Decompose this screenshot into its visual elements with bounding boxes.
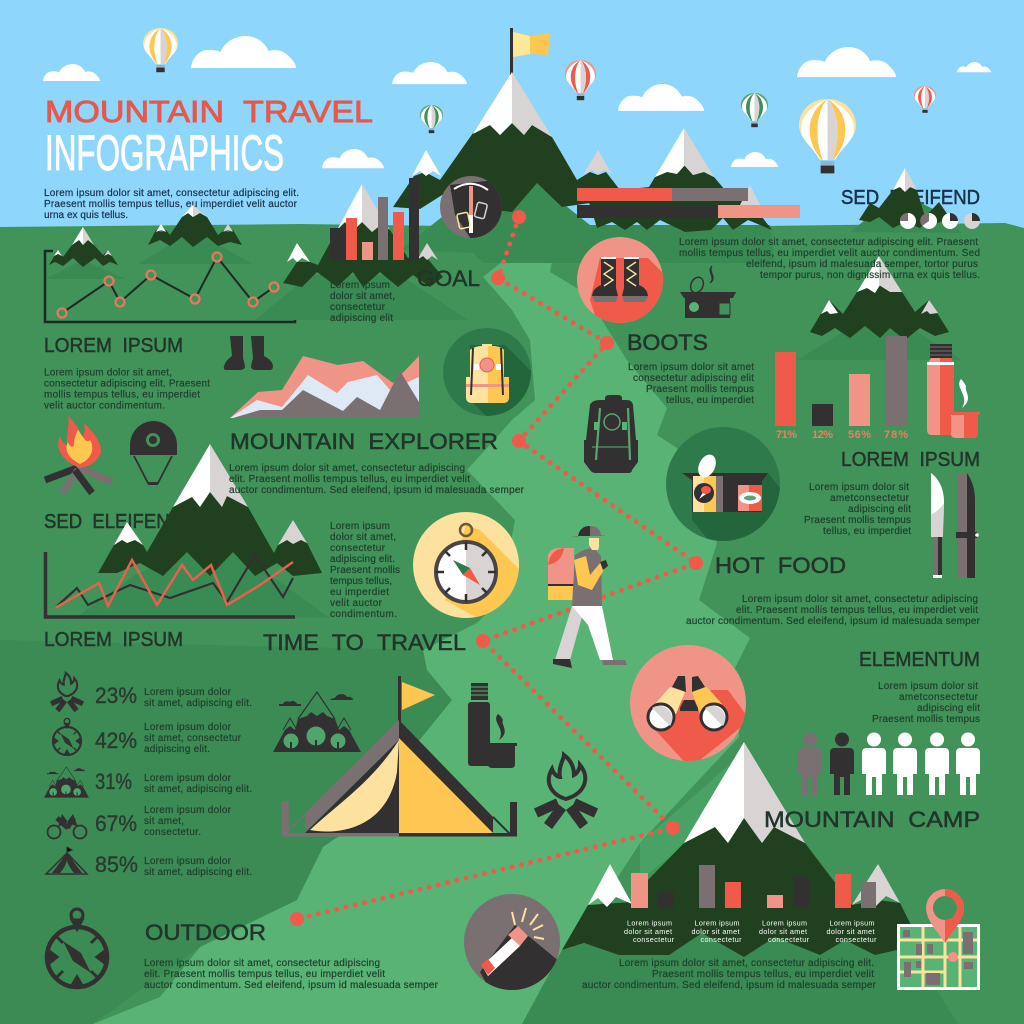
backpack circle bbox=[443, 328, 531, 416]
text under mountain bars: dolor sit amet, bbox=[330, 291, 395, 302]
explorer text: auctor condimentum. Sed eleifend, ipsum id malesuada semper bbox=[229, 485, 525, 496]
grass ground bbox=[0, 223, 1024, 1024]
bars on camp mountain bbox=[631, 865, 876, 908]
explorer text: Lorem ipsum dolor sit amet, consectetur adipiscing bbox=[229, 463, 465, 474]
middle text column: adipiscing elit. bbox=[330, 554, 395, 565]
heading: mountain explorer: MOUNTAIN EXPLORER bbox=[230, 429, 498, 454]
bottom right text bbox=[582, 958, 877, 991]
title: MOUNTAIN TRAVEL bbox=[45, 94, 373, 129]
icon: campfire bbox=[45, 416, 112, 493]
outdoor text: Lorem ipsum dolor sit amet, consectetur adipiscing bbox=[144, 958, 380, 969]
left text block: velit auctor condimentum. bbox=[44, 400, 165, 412]
stat row 31%: sit amet, adipiscing elit. bbox=[144, 784, 252, 795]
middle text column: Praesent mollis bbox=[330, 565, 400, 576]
white captions under bars: Lorem ipsum bbox=[627, 918, 672, 928]
bar chart with percentages: 71% bbox=[776, 429, 797, 441]
boots text: Lorem ipsum dolor sit amet bbox=[628, 362, 754, 373]
icon: mountain and trees bbox=[273, 692, 361, 752]
white captions under bars: Lorem ipsum bbox=[694, 918, 740, 928]
bottom right text: Praesent mollis tempus tellus, eu imperdiet velit bbox=[652, 969, 874, 980]
hot food text: Lorem ipsum dolor sit amet, consectetur adipiscing bbox=[742, 594, 978, 605]
white captions under bars: consectetur bbox=[700, 935, 742, 944]
pie charts bbox=[900, 213, 980, 229]
stat row 23%: sit amet, adipiscing elit. bbox=[144, 698, 252, 709]
light green trail bbox=[93, 253, 750, 1024]
intro text: urna ex quis tellus. bbox=[44, 210, 128, 221]
stat row 23%: 23% bbox=[95, 683, 137, 708]
title: INFOGRAPHICS bbox=[45, 125, 284, 181]
stat row 85%: 85% bbox=[95, 852, 138, 877]
hiker bbox=[548, 526, 627, 668]
stat row 85% bbox=[46, 847, 252, 878]
hot food text: elit. Praesent mollis tempus tellus, eu imperdiet velit bbox=[736, 605, 978, 616]
icon: outlined campfire bbox=[536, 755, 596, 826]
white captions under bars: Lorem ipsum bbox=[762, 918, 807, 928]
top right text bbox=[679, 237, 980, 281]
white captions under bars: consectetur bbox=[768, 935, 810, 944]
white captions under bars: consectetur bbox=[633, 935, 675, 944]
stat row 23% bbox=[51, 673, 252, 711]
outdoor text: auctor condimentum. Sed eleifend, ipsum id malesuada semper bbox=[144, 980, 439, 991]
white captions under bars: dolor sit amet bbox=[624, 927, 672, 936]
white captions under bars: dolor sit amet bbox=[759, 927, 807, 936]
left text block: Lorem ipsum dolor sit amet, bbox=[44, 368, 172, 378]
people pictogram bbox=[798, 732, 980, 795]
white captions under bars bbox=[624, 918, 877, 944]
knives text: adipiscing elit bbox=[848, 504, 911, 515]
icon: helmet bbox=[130, 421, 177, 485]
bottom right text: Lorem ipsum dolor sit amet, consectetur adipiscing elit. bbox=[619, 958, 874, 969]
mountain with bars bbox=[255, 178, 468, 320]
heading: goal: GOAL bbox=[417, 266, 480, 291]
boots text: Praesent mollis tempus bbox=[646, 384, 754, 395]
tent bbox=[282, 676, 517, 836]
line chart mid left bbox=[46, 552, 295, 617]
clouds bbox=[43, 36, 991, 168]
heading: elementum: ELEMENTUM bbox=[859, 649, 980, 671]
knives text: Lorem ipsum dolor sit bbox=[809, 482, 909, 493]
right mountain bbox=[797, 256, 962, 360]
intro text: Praesent mollis tempus tellus, eu imperdiet velit auctor bbox=[44, 199, 298, 210]
bar chart with percentages: 78% bbox=[884, 429, 908, 441]
intro text bbox=[44, 188, 299, 221]
bar chart with percentages: 56% bbox=[848, 429, 871, 441]
stat row 67%: sit amet, bbox=[144, 816, 184, 827]
stat row 67%: consectetur. bbox=[144, 827, 201, 838]
compass circle bbox=[413, 512, 519, 618]
middle text column: dolor sit amet, bbox=[330, 532, 396, 543]
outdoor text: elit. Praesent mollis tempus tellus, eu imperdiet velit bbox=[144, 969, 385, 980]
lower left ground shade bbox=[0, 640, 452, 1024]
heading: outdoor: OUTDOOR bbox=[145, 920, 266, 945]
stat row 31% bbox=[44, 767, 252, 798]
stat row 85%: Lorem ipsum dolor bbox=[144, 856, 232, 867]
heading: lorem ipsum right: LOREM IPSUM bbox=[841, 449, 980, 471]
bar chart with percentages: 12% bbox=[812, 429, 833, 441]
knives text: ametconsectetur bbox=[830, 493, 910, 504]
heading: time to travel: TIME TO TRAVEL bbox=[263, 630, 466, 655]
top right text: eleifend, ipsum id malesuada semper, tortor purus bbox=[746, 259, 978, 270]
elementum text: Lorem ipsum dolor sit bbox=[878, 681, 978, 692]
heading: lorem ipsum lower: LOREM IPSUM bbox=[44, 629, 183, 651]
second small mountains bbox=[138, 205, 252, 264]
top right text: tempor purus, non dignissim urna ex quis tellus. bbox=[760, 270, 980, 281]
top right text: Lorem ipsum dolor sit amet, consectetur adipiscing elit. Praesent bbox=[679, 237, 978, 248]
mid band on lower mountain bbox=[640, 760, 744, 880]
binoculars circle bbox=[630, 645, 750, 768]
icon: dark thermos and cup bbox=[468, 683, 517, 768]
middle text column: Lorem ipsum bbox=[330, 521, 390, 532]
summit mountain group bbox=[393, 72, 775, 263]
icon: large compass bbox=[47, 909, 107, 987]
stat row 67%: Lorem ipsum dolor bbox=[144, 805, 232, 816]
heading: boots: BOOTS bbox=[627, 330, 708, 355]
stat row 67%: 67% bbox=[95, 811, 137, 836]
hot food text bbox=[686, 594, 981, 627]
lower mountain base bbox=[522, 900, 958, 1024]
elementum text: adipiscing elit bbox=[917, 703, 980, 714]
elementum text: ametconsectetur bbox=[899, 692, 979, 703]
small left mountains bbox=[45, 227, 125, 279]
icon: knives bbox=[931, 473, 979, 578]
stat row 42%: sit amet, consectetur bbox=[144, 733, 242, 744]
outdoor text bbox=[144, 958, 439, 991]
heading: hot food: HOT FOOD bbox=[715, 553, 846, 578]
heading: lorem ipsum left: LOREM IPSUM bbox=[44, 335, 183, 357]
bar chart with percentages bbox=[775, 336, 908, 441]
top right text: mollis tempus tellus, eu imperdiet velit auctor condimentum. Sed bbox=[679, 248, 980, 259]
white captions under bars: Lorem ipsum bbox=[830, 918, 874, 928]
left text block bbox=[44, 368, 210, 412]
knives text: tellus, eu imperdiet bbox=[823, 526, 911, 537]
route nodes bbox=[290, 210, 703, 926]
elementum text: Praesent mollis tempus bbox=[872, 714, 980, 725]
stat row 42%: Lorem ipsum dolor bbox=[144, 722, 232, 733]
heading: mountain camp: MOUNTAIN CAMP bbox=[764, 807, 980, 832]
hot air balloons bbox=[143, 28, 936, 173]
white captions under bars: consectetur bbox=[836, 935, 877, 944]
hot food circle bbox=[666, 427, 780, 541]
white captions under bars: dolor sit amet bbox=[826, 927, 874, 936]
stat row 42% bbox=[53, 718, 242, 755]
text under mountain bars: Lorem ipsum bbox=[330, 280, 390, 291]
heading: sed eleifend left: SED ELEIFEND bbox=[44, 511, 183, 533]
flashlight circle bbox=[464, 894, 560, 1000]
middle text column: tempus tellus, bbox=[330, 576, 392, 587]
text under mountain bars: consectetur bbox=[330, 302, 386, 313]
boots circle bbox=[577, 237, 663, 323]
icon: cooking pot bbox=[680, 266, 736, 318]
stat row 31%: 31% bbox=[95, 769, 132, 794]
stat row 31%: Lorem ipsum dolor bbox=[144, 773, 232, 784]
stat row 67% bbox=[48, 805, 232, 838]
middle text column: consectetur bbox=[330, 543, 386, 554]
stat row 42%: adipiscing elit. bbox=[144, 744, 210, 755]
middle text column: eu imperdiet bbox=[330, 587, 389, 598]
middle text column bbox=[330, 521, 400, 620]
right top mountain bbox=[850, 168, 962, 233]
explorer text: elit. Praesent mollis tempus tellus, eu imperdiet velit bbox=[229, 474, 470, 485]
boots text bbox=[628, 362, 754, 406]
elementum text bbox=[872, 681, 980, 725]
stat row 42%: 42% bbox=[95, 728, 137, 753]
bottom right text: auctor condimentum. Sed eleifend, ipsum id malesuada semper bbox=[582, 980, 877, 991]
title bbox=[45, 94, 373, 181]
text under mountain bars: adipiscing elit bbox=[330, 313, 393, 324]
area chart bbox=[230, 356, 419, 418]
sky background bbox=[0, 0, 1024, 240]
text under mountain bars bbox=[330, 280, 395, 324]
knives text bbox=[804, 482, 911, 537]
icon: dark backpack bbox=[584, 395, 638, 473]
boots text: consectetur adipiscing elit bbox=[633, 373, 754, 384]
middle text column: velit auctor bbox=[330, 598, 383, 609]
explorer text bbox=[229, 463, 525, 496]
icon: hiking boots bbox=[224, 336, 273, 370]
left text block: consectetur adipiscing elit. Praesent bbox=[44, 378, 210, 390]
heading: sed eleifend right: SED ELEIFEND bbox=[841, 187, 980, 209]
camp mountain bbox=[562, 742, 912, 957]
percent stats list bbox=[44, 673, 252, 878]
flag on summit bbox=[510, 28, 550, 78]
large left mountain bbox=[75, 444, 330, 618]
icon: ice axe and carabiners circle bbox=[440, 176, 502, 238]
bar chart on summit range bbox=[577, 188, 800, 218]
boots text: tellus, eu imperdiet bbox=[666, 395, 754, 406]
stat row 23%: Lorem ipsum dolor bbox=[144, 687, 232, 698]
stat row 85%: sit amet, adipiscing elit. bbox=[144, 867, 252, 878]
left text block: mollis tempus tellus, eu imperdiet bbox=[44, 390, 200, 400]
intro text: Lorem ipsum dolor sit amet, consectetur adipiscing elit. bbox=[44, 188, 299, 199]
white captions under bars: dolor sit amet bbox=[692, 927, 740, 936]
middle text column: condimentum. bbox=[330, 609, 397, 620]
dotted route bbox=[297, 217, 696, 919]
icon: location pin bbox=[926, 889, 964, 943]
line chart top left bbox=[45, 251, 295, 322]
knives text: Praesent mollis tempus bbox=[804, 515, 911, 526]
icon: coral thermos and cup bbox=[927, 344, 980, 438]
hot food text: auctor condimentum. Sed eleifend, ipsum id malesuada semper bbox=[686, 616, 981, 627]
icon: map bbox=[897, 924, 980, 990]
